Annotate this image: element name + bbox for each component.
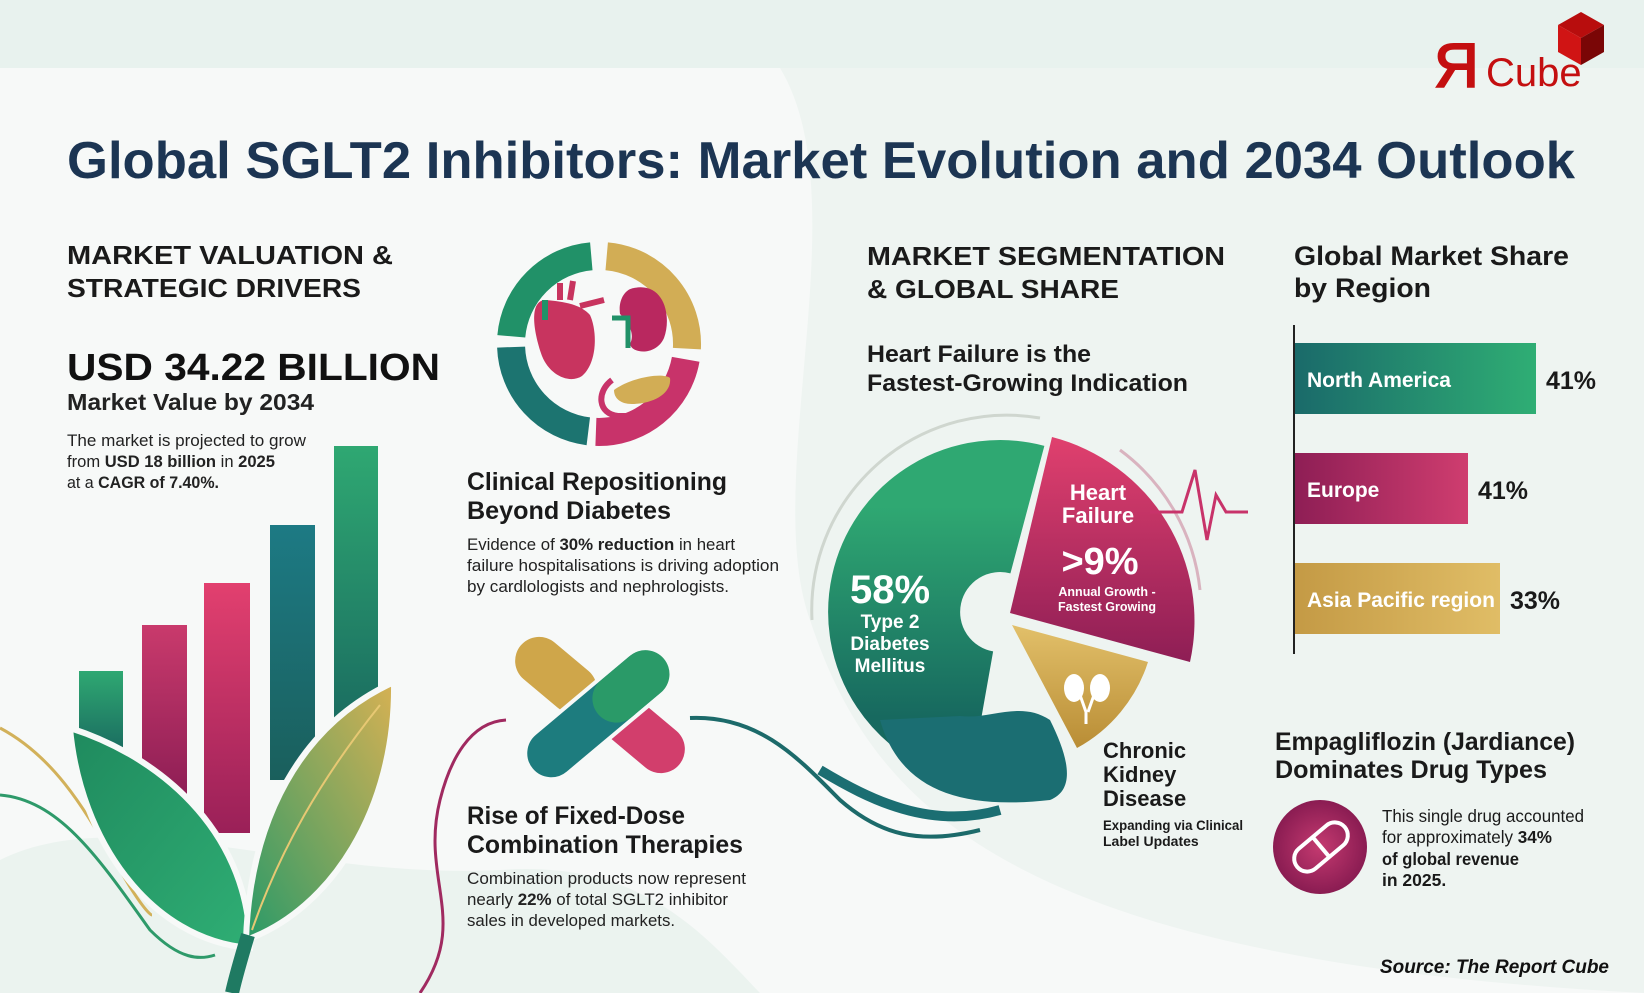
bar: europe	[1295, 453, 1528, 524]
segment: CKD	[1012, 625, 1148, 748]
logo: RCube: Cube	[1486, 51, 1582, 95]
text: clinical evidence: Evidence of 30% reduction in heart	[467, 535, 735, 554]
text: drug revenue: in 2025.	[1382, 870, 1446, 890]
bar chart: region share	[1294, 325, 1596, 654]
heading: empagliflozin: Dominates Drug Types	[1275, 756, 1547, 784]
heading: clinical repositioning: Beyond Diabetes	[467, 497, 671, 525]
bar: europe: 41%	[1478, 477, 1528, 505]
text: drug revenue: of global revenue	[1382, 849, 1519, 869]
heading: market segmentation: MARKET SEGMENTATION	[867, 241, 1225, 271]
heading: market valuation	[67, 240, 393, 303]
leaf left	[70, 728, 250, 948]
icon: kidneys	[1064, 674, 1110, 724]
label: chronic kidney disease: Disease	[1103, 786, 1186, 811]
text: clinical evidence: failure hospitalisations is driving adoption	[467, 556, 779, 575]
label: heart failure	[1058, 480, 1156, 614]
text: combination products: sales in developed markets.	[467, 911, 675, 930]
icon: organ ring	[511, 256, 687, 432]
heading: fixed-dose combination: Rise of Fixed-Dose	[467, 802, 685, 830]
heart	[534, 300, 595, 379]
heading: clinical repositioning	[467, 468, 727, 525]
text: combination products: nearly 22% of total SGLT2 inhibitor	[467, 890, 728, 909]
heading: empagliflozin	[1275, 728, 1575, 784]
heading: empagliflozin: Empagliflozin (Jardiance)	[1275, 728, 1575, 756]
label: chronic kidney disease	[1103, 738, 1243, 849]
label: 58%: Diabetes	[850, 634, 930, 655]
tail swoosh	[880, 711, 1067, 802]
decorative curves left	[0, 728, 215, 957]
label: heart failure: Annual Growth -	[1058, 585, 1156, 599]
stem	[232, 935, 248, 993]
text: clinical evidence	[467, 535, 779, 596]
label: 58%: Type 2	[861, 612, 919, 633]
stat: USD 34.22 billion: Market Value by 2034	[67, 389, 314, 415]
icon: combination pills	[505, 627, 695, 790]
text: combination products: Combination products now represent	[467, 869, 746, 888]
label: 58%: Mellitus	[855, 656, 925, 677]
bar: asia pacific: Asia Pacific region	[1307, 589, 1495, 612]
bar: north america	[1295, 343, 1596, 414]
text: market projection: from USD 18 billion in 2025	[67, 452, 275, 471]
icon: capsule circle	[1273, 800, 1367, 894]
label: chronic kidney disease: Expanding via Clinical	[1103, 817, 1243, 833]
segment: heart failure	[1010, 437, 1194, 662]
label: chronic kidney disease: Kidney	[1103, 762, 1177, 787]
text: clinical evidence: by cardlologists and nephrologists.	[467, 577, 729, 596]
subheading: heart failure fastest: Fastest-Growing Indication	[867, 370, 1188, 397]
heading: fixed-dose combination	[467, 802, 743, 859]
text: drug revenue	[1382, 806, 1584, 890]
heading: market segmentation: & GLOBAL SHARE	[867, 274, 1119, 304]
bar chart with plant	[70, 446, 394, 993]
kidney	[620, 287, 667, 352]
heading: market share by region	[1294, 241, 1569, 303]
text: market projection: The market is projected to grow	[67, 431, 307, 450]
text: market projection: at a CAGR of 7.40%.	[67, 473, 219, 492]
subheading: heart failure fastest	[867, 341, 1188, 397]
segment: type 2 diabetes	[894, 506, 1027, 716]
stat: USD 34.22 billion	[67, 347, 440, 415]
bar: europe: Europe	[1307, 479, 1379, 502]
stat: USD 34.22 billion: USD 34.22 BILLION	[67, 347, 440, 389]
text: combination products	[467, 869, 746, 930]
text: drug revenue: This single drug accounted	[1382, 806, 1584, 826]
title: Global SGLT2 Inhibitors: Market Evolution and 2034 Outlook	[67, 132, 1575, 190]
source note: Source: The Report Cube	[1380, 957, 1609, 978]
label: 58%: 58%	[850, 568, 930, 612]
heading: market valuation: STRATEGIC DRIVERS	[67, 273, 361, 303]
bar: asia pacific: 33%	[1510, 587, 1560, 615]
heading: market share by region: Global Market Share	[1294, 241, 1569, 271]
leaf right	[246, 682, 394, 940]
label: chronic kidney disease: Chronic	[1103, 738, 1186, 763]
icon: heartbeat	[1150, 470, 1248, 540]
logo: RCube	[1434, 12, 1604, 101]
bar: north america: 41%	[1546, 367, 1596, 395]
bar: asia pacific	[1295, 563, 1560, 634]
heading: market segmentation	[867, 241, 1225, 304]
text: drug revenue: for approximately 34%	[1382, 827, 1552, 847]
heading: clinical repositioning: Clinical Repositioning	[467, 468, 727, 496]
label: 58%	[850, 568, 930, 677]
label: heart failure: >9%	[1061, 541, 1139, 583]
label: heart failure: Heart	[1070, 480, 1127, 505]
connector curves around pills	[420, 718, 980, 993]
label: heart failure: Failure	[1062, 503, 1134, 528]
subheading: heart failure fastest: Heart Failure is the	[867, 341, 1091, 368]
heading: market valuation: MARKET VALUATION &	[67, 240, 393, 270]
heading: fixed-dose combination: Combination Therapies	[467, 831, 743, 859]
donut chart: segmentation	[812, 415, 1248, 816]
text: market projection	[67, 431, 307, 492]
label: chronic kidney disease: Label Updates	[1103, 833, 1199, 849]
bar: north america: North America	[1307, 369, 1451, 392]
pancreas	[614, 376, 670, 404]
label: heart failure: Fastest Growing	[1058, 600, 1156, 614]
logo: RCube: Я	[1434, 32, 1479, 101]
heading: market share by region: by Region	[1294, 273, 1431, 303]
